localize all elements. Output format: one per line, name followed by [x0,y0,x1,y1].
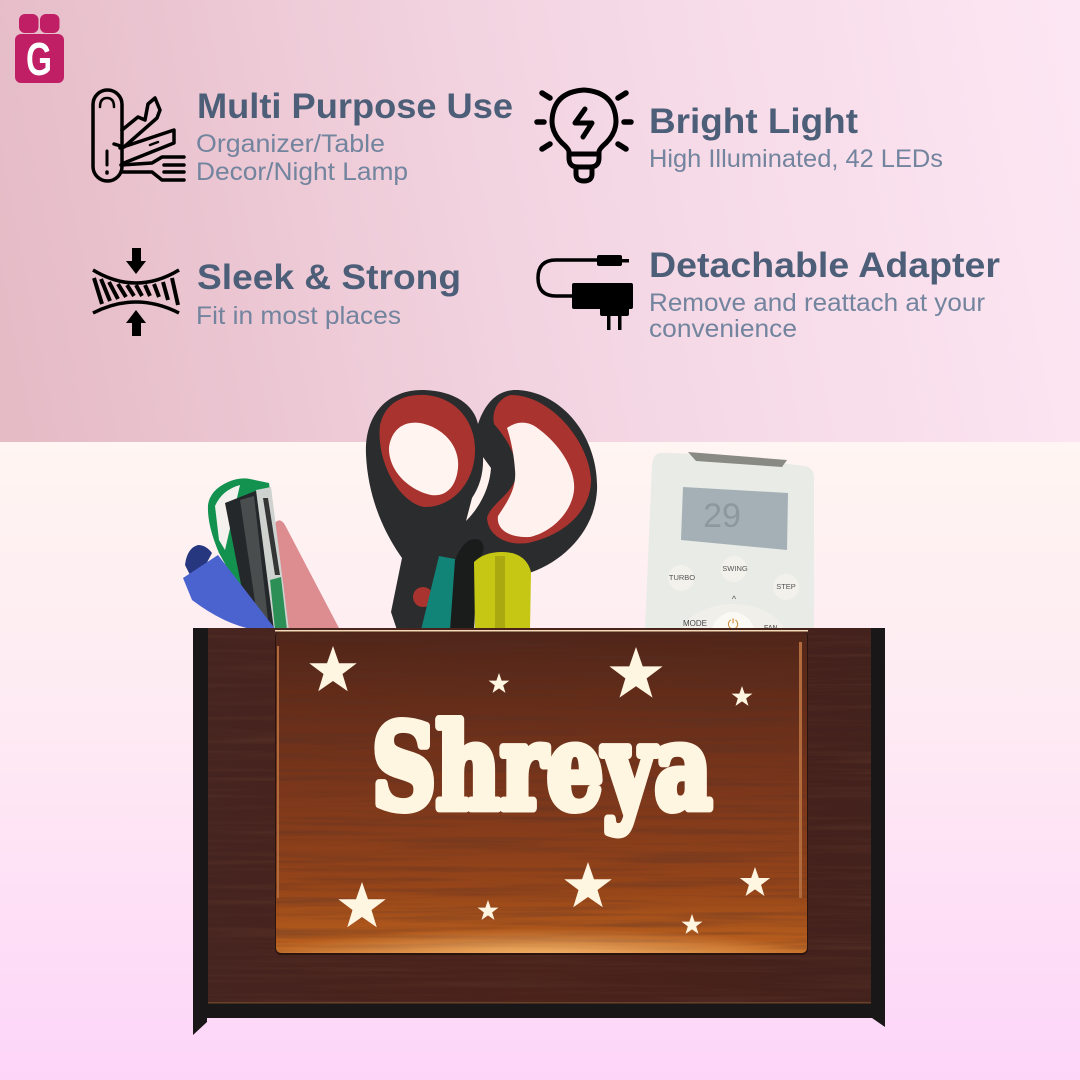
pink item [275,520,340,630]
stars [309,646,770,934]
feature: bright light [537,90,943,181]
AC remote: FAN [764,625,778,632]
pen packet [208,478,289,630]
AC remote: ⏻ [727,616,739,632]
logo: pink gift box with G: G [26,33,52,85]
pivot dot [413,587,433,607]
heading: Sleek & Strong [197,258,461,297]
blue marker [183,545,276,630]
subtext line 2: convenience [649,315,797,343]
feature: detachable adapter [538,246,1000,343]
lit window [275,631,808,955]
product photo: desk organizer [183,390,885,1035]
subtext [196,130,408,186]
wooden box [193,628,885,1035]
heading: Bright Light [649,102,858,141]
subtext: Remove and reattach at your [649,289,985,317]
AC remote: SWING [722,564,748,573]
AC remote: 29 [703,497,741,535]
gap between handles [466,457,491,521]
left red grip [380,395,475,507]
right finger hole [498,423,574,537]
bottom rim line [208,1002,871,1004]
handles and blade [366,390,597,630]
AC remote: STEP [776,582,796,591]
feature: multi purpose use [93,87,513,186]
AC remote [645,452,814,676]
feature: sleek and strong [93,248,461,336]
AC remote: TURBO [669,573,695,582]
window side rails [277,646,279,898]
wood front [208,628,871,1003]
subtext: Fit in most places [196,302,401,330]
AC remote: ^ [732,594,737,604]
icon: light bulb [537,90,631,181]
name: Shreya: Shreya [372,700,712,836]
icon: power adapter [538,255,633,330]
right red grip [487,395,591,543]
icon: multi-tool knife [93,90,184,181]
subtext: Decor/Night Lamp [196,158,408,186]
AC remote: MODE [683,619,707,628]
scissors [366,390,597,630]
left finger hole [389,423,458,495]
box edge [193,628,885,1035]
icon: compressed material with arrows [93,248,179,336]
green handle and yellow screwdriver [421,539,531,630]
heading: Multi Purpose Use [197,87,513,126]
top background band [0,0,1080,442]
logo: pink gift box with G [15,14,64,85]
subtext: High Illuminated, 42 LEDs [649,145,943,173]
subtext: Organizer/Table [196,130,385,158]
bottom background band [0,442,1080,1080]
heading: Detachable Adapter [649,246,1000,285]
